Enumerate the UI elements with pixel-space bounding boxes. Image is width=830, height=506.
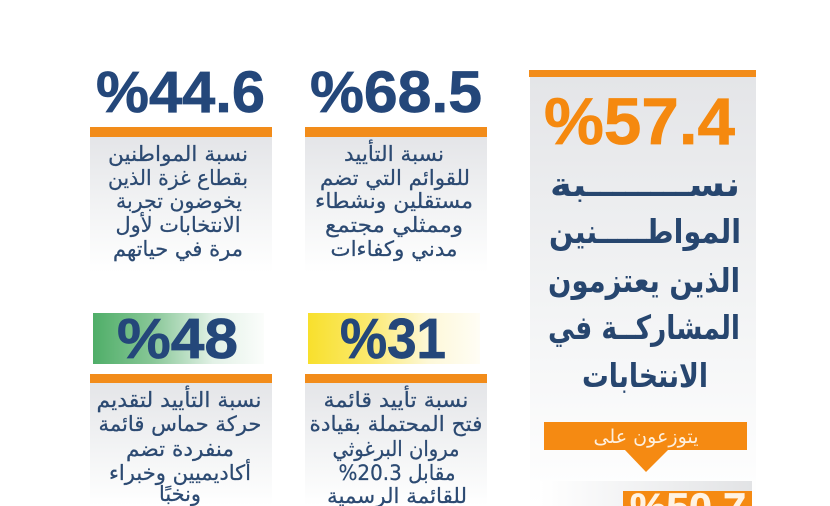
panel: statistic 48%: %48 xyxy=(117,307,238,371)
main description: المواطـــــنين xyxy=(549,212,741,252)
panel: statistic 68.5% xyxy=(305,60,487,273)
panel: statistic 44.6%: %44.6 xyxy=(96,60,265,125)
description 44.6% xyxy=(108,142,248,262)
description 48%: منفردة تضم xyxy=(126,437,234,462)
panel: statistic 68.5%: %68.5 xyxy=(310,60,482,125)
description 48%: أكاديميين وخبراء xyxy=(109,459,251,485)
description 44.6%: يخوضون تجربة xyxy=(116,189,242,213)
panel: statistic 44.6% xyxy=(90,60,272,273)
description 68.5%: للقوائم التي تضم xyxy=(320,166,470,191)
main panel top bar xyxy=(529,70,756,77)
description 48%: نسبة التأييد لتقديم xyxy=(96,385,262,413)
description 68.5%: نسبة التأييد xyxy=(344,139,444,166)
cropped sub-statistic xyxy=(540,481,752,506)
description 68.5% xyxy=(315,139,473,261)
description 68.5%: مستقلين ونشطاء xyxy=(315,189,473,213)
main percentage: %57.4 xyxy=(544,84,735,158)
description 44.6%: بقطاع غزة الذين xyxy=(108,166,248,190)
panel: main statistic 57.4% xyxy=(529,70,756,506)
panel: statistic 48% xyxy=(90,307,272,506)
description 31%: مروان البرغوثي xyxy=(332,437,460,461)
description 48%: حركة حماس قائمة xyxy=(98,412,262,436)
description 44.6%: الانتخابات لأول xyxy=(116,212,240,237)
description 31%: مقابل 20.3% xyxy=(338,461,456,485)
panel: statistic 31% xyxy=(305,307,487,506)
description 44.6%: نسبة المواطنين xyxy=(108,142,248,166)
main description: المشاركــة في xyxy=(548,308,740,347)
main description: الذين يعتزمون xyxy=(548,261,740,301)
description 44.6%: مرة في حياتهم xyxy=(113,237,243,262)
description 68.5%: وممثلي مجتمع xyxy=(325,213,463,237)
description 31%: فتح المحتملة بقيادة xyxy=(310,412,482,436)
callout banner with arrow: يتوزعون على xyxy=(594,426,698,448)
description 68.5%: مدني وكفاءات xyxy=(330,237,458,261)
description 48%: ونخبًا xyxy=(159,482,201,506)
main description xyxy=(548,165,741,395)
description 31% xyxy=(310,385,482,506)
description 48% xyxy=(96,385,262,506)
main description: الانتخابات xyxy=(582,356,708,395)
main description: نســــــــبة xyxy=(550,165,740,204)
description 31%: نسبة تأييد قائمة xyxy=(324,385,468,412)
panel: statistic 31%: %31 xyxy=(340,307,446,371)
callout banner with arrow xyxy=(544,422,747,472)
